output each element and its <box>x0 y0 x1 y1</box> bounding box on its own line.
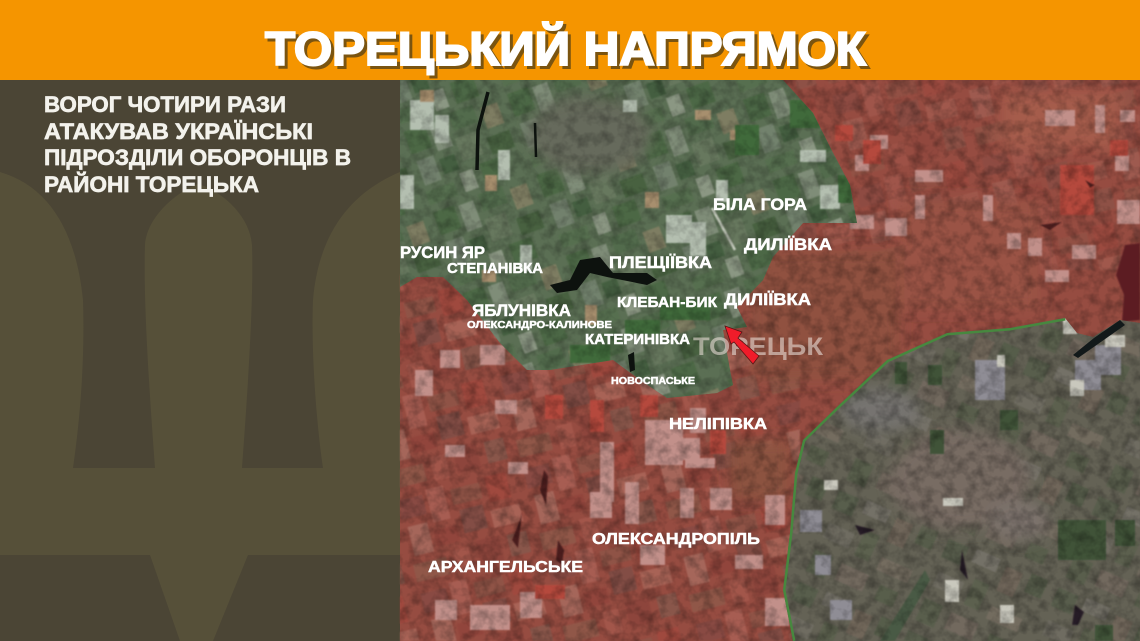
label: Яблунівка: ЯБЛУНІВКА <box>472 301 571 320</box>
pale strip road <box>712 208 735 250</box>
trident emblem watermark <box>0 172 400 641</box>
text block: summary: ПІДРОЗДІЛИ ОБОРОНЦІВ В <box>44 145 351 170</box>
title: ТОРЕЦЬКИЙ НАПРЯМОК <box>268 25 869 78</box>
label: Плещіївка: ПЛЕЩІЇВКА <box>609 253 712 272</box>
grey-green Ukrainian rear zone south-east <box>780 310 1140 641</box>
text block: summary <box>44 92 351 197</box>
label: Неліпівка: НЕЛІПІВКА <box>669 416 768 433</box>
water body north-east <box>1116 243 1140 322</box>
left panel background <box>0 80 400 641</box>
label: Архангельське: АРХАНГЕЛЬСЬКЕ <box>428 559 583 576</box>
dark reservoirs <box>477 92 657 372</box>
brown steppe patches <box>730 90 1120 500</box>
label: Степанівка: СТЕПАНІВКА <box>447 261 544 277</box>
label: Олександро-Калинове: ОЛЕКСАНДРО-КАЛИНОВЕ <box>467 319 612 331</box>
green held territory <box>400 80 870 410</box>
label: Новоспаське: НОВОСПАСЬКЕ <box>611 375 695 387</box>
label: Біла Гора: БІЛА ГОРА <box>713 195 807 214</box>
label: Катеринівка: КАТЕРИНІВКА <box>585 332 691 348</box>
text block: summary: ВОРОГ ЧОТИРИ РАЗИ <box>44 92 286 117</box>
text block: summary: АТАКУВАВ УКРАЇНСЬКІ <box>44 119 313 144</box>
urban patches <box>840 388 1050 540</box>
label: Олександропіль: ОЛЕКСАНДРОПІЛЬ <box>592 531 760 548</box>
header bar <box>0 0 1140 80</box>
dark ponds in red zone <box>512 180 1095 565</box>
town area <box>528 95 652 175</box>
title: ТОРЕЦЬКИЙ НАПРЯМОК <box>265 22 866 75</box>
dark water near frontline <box>1073 320 1125 358</box>
label: Дилїївка south: ДИЛІЇВКА <box>724 290 811 309</box>
panel: map <box>400 80 1140 641</box>
map labels <box>400 195 832 576</box>
text block: summary: РАЙОНІ ТОРЕЦЬКА <box>44 172 259 197</box>
green frontline edge <box>783 318 1065 641</box>
label: Клебан-Бик: КЛЕБАН-БИК <box>617 295 717 311</box>
noise over red <box>400 80 1140 641</box>
label: Торецьк: ТОРЕЦЬК <box>693 333 824 361</box>
icon: red attack arrow <box>725 326 759 364</box>
red zone fields <box>415 105 1140 630</box>
base red occupied territory <box>400 80 1140 641</box>
label: Русин Яр: РУСИН ЯР <box>400 243 485 262</box>
label: Дилїївка north: ДИЛІЇВКА <box>744 235 832 254</box>
